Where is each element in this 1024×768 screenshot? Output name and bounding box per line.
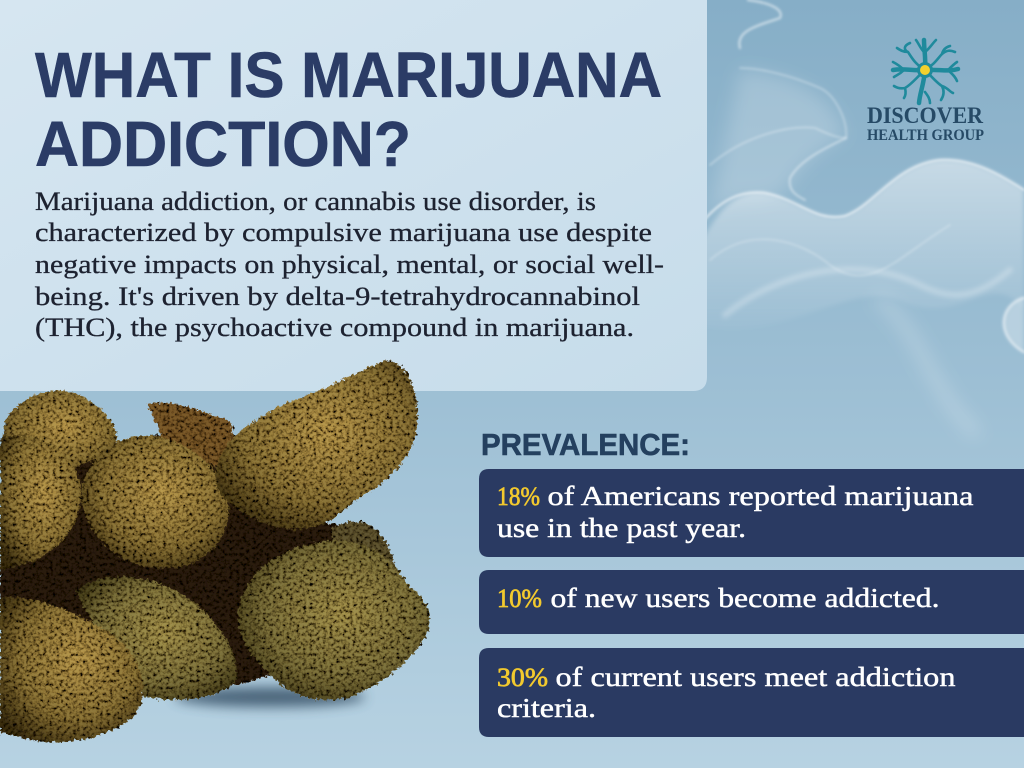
bud shadow — [175, 687, 365, 707]
title: WHAT IS MARIJUANA — [35, 39, 662, 111]
stat card: 18% — [479, 469, 1024, 557]
stat card: 18%: use in the past year. — [497, 513, 746, 543]
text block: definition: being. It's driven by delta-9-tetrahydrocannabinol — [35, 282, 640, 311]
photo: cannabis buds — [0, 360, 430, 742]
logo wordmark: DISCOVER — [867, 103, 983, 128]
stat card: 30%: of current users meet addiction — [556, 662, 956, 692]
text block: definition: negative impacts on physical, mental, or social well- — [35, 250, 664, 279]
stat card: 10% — [479, 570, 1024, 634]
stat card: 30%: criteria. — [497, 693, 596, 723]
icon: neuron core — [920, 65, 930, 75]
right-back bud — [330, 521, 395, 585]
heading: prevalence: PREVALENCE: — [481, 427, 690, 462]
top right bud — [216, 360, 418, 529]
icon: neuron — [893, 40, 958, 103]
logo wordmark — [867, 103, 984, 144]
stat card: 10%: of new users become addicted. — [550, 583, 940, 613]
lower right bud — [239, 541, 430, 700]
panel: intro — [0, 0, 707, 391]
text block: definition: (THC), the psychoactive compound in marijuana. — [35, 313, 634, 342]
logo: Discover Health Group — [867, 40, 984, 144]
text block: definition: characterized by compulsive marijuana use despite — [35, 218, 652, 247]
lower middle bud — [76, 577, 237, 700]
stat card: 30%: 30% — [497, 663, 548, 692]
buds — [0, 360, 430, 742]
smoke — [700, 0, 1024, 432]
lower left bud — [0, 597, 143, 742]
text block: definition: Marijuana addiction, or cannabis use disorder, is — [35, 187, 596, 216]
centre bud — [82, 435, 229, 568]
logo wordmark: HEALTH GROUP — [867, 127, 984, 144]
title: ADDICTION? — [35, 108, 411, 180]
title — [35, 39, 662, 180]
text block: definition — [35, 187, 664, 342]
top left bud — [0, 391, 117, 475]
back bud — [147, 403, 236, 470]
dark mass between buds — [0, 435, 348, 695]
stat card: 18%: 18% — [497, 482, 540, 511]
stat card: 30% — [479, 648, 1024, 737]
left bud — [0, 435, 81, 570]
stat card: 10%: 10% — [497, 584, 542, 613]
stat card: 18%: of Americans reported marijuana — [548, 481, 974, 511]
